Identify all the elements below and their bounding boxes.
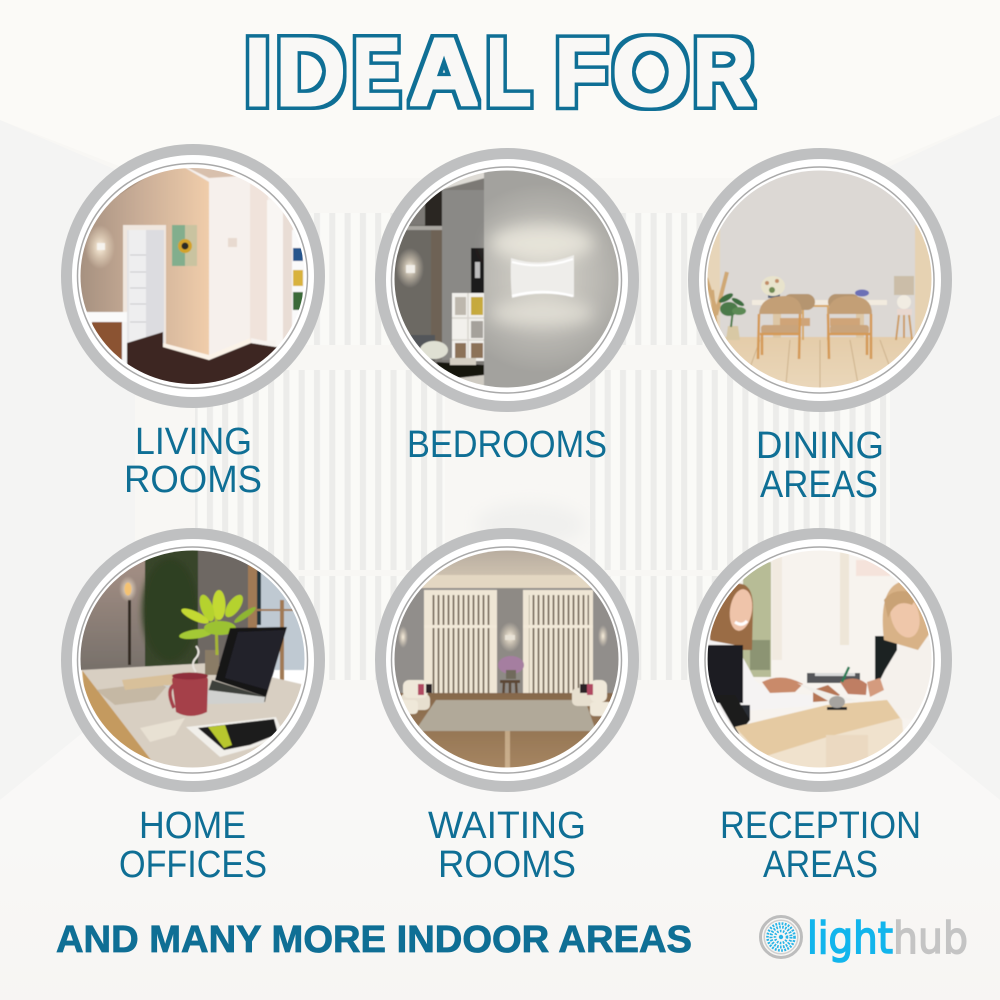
panel: dining areas <box>694 154 946 506</box>
photo: dining area <box>705 165 935 397</box>
label: reception areas: AREAS <box>763 844 878 886</box>
service bell <box>827 707 847 710</box>
photo: reception area <box>708 550 932 768</box>
bottom tagline: AND MANY MORE INDOOR AREAS <box>56 919 692 961</box>
title: F <box>555 19 608 126</box>
label: bedrooms: BEDROOMS <box>407 424 607 466</box>
logo wordmark: hub <box>893 913 968 964</box>
circular frame: living rooms <box>66 150 320 402</box>
label: living rooms: LIVING <box>135 421 252 463</box>
title: R <box>693 19 754 126</box>
label: living rooms: ROOMS <box>124 459 262 501</box>
panel: home offices <box>66 534 320 886</box>
circular frame: waiting rooms <box>380 534 634 786</box>
label: waiting rooms: WAITING <box>428 805 586 847</box>
label: dining areas: AREAS <box>760 464 878 506</box>
label: home offices <box>119 805 267 886</box>
label: dining areas <box>756 425 884 506</box>
right customer <box>880 650 898 682</box>
photo: bedroom <box>394 170 618 388</box>
label: waiting rooms <box>428 805 586 886</box>
logo wordmark <box>807 913 968 964</box>
circular frame: dining areas <box>694 154 946 406</box>
label: dining areas: DINING <box>756 425 884 467</box>
panel: bedrooms <box>380 154 634 466</box>
photo: waiting room <box>394 550 618 768</box>
left receptionist <box>710 584 753 650</box>
label: home offices: OFFICES <box>119 844 267 886</box>
title: L <box>487 19 530 126</box>
label: home offices: HOME <box>139 805 246 847</box>
panel: waiting rooms <box>380 534 634 886</box>
panel: reception areas <box>694 534 946 886</box>
panel: living rooms <box>66 150 320 501</box>
photo: home office <box>80 550 304 768</box>
title: E <box>353 19 400 126</box>
logo: lighthub <box>760 913 968 964</box>
label: reception areas <box>720 805 921 886</box>
circular frame: reception areas <box>694 534 946 786</box>
circular frame: bedrooms <box>380 154 634 406</box>
title: D <box>276 19 346 126</box>
label: living rooms <box>124 421 262 501</box>
title <box>244 19 754 126</box>
label: waiting rooms: ROOMS <box>438 844 576 886</box>
title: I <box>244 19 270 126</box>
title: A <box>409 19 479 126</box>
photo: living room <box>80 168 304 384</box>
logo wordmark: light <box>807 913 893 964</box>
label: reception areas: RECEPTION <box>720 805 921 847</box>
circular frame: home offices <box>66 534 320 786</box>
reception counter <box>734 716 904 768</box>
icon: light ring <box>760 916 802 958</box>
title: O <box>612 19 689 126</box>
